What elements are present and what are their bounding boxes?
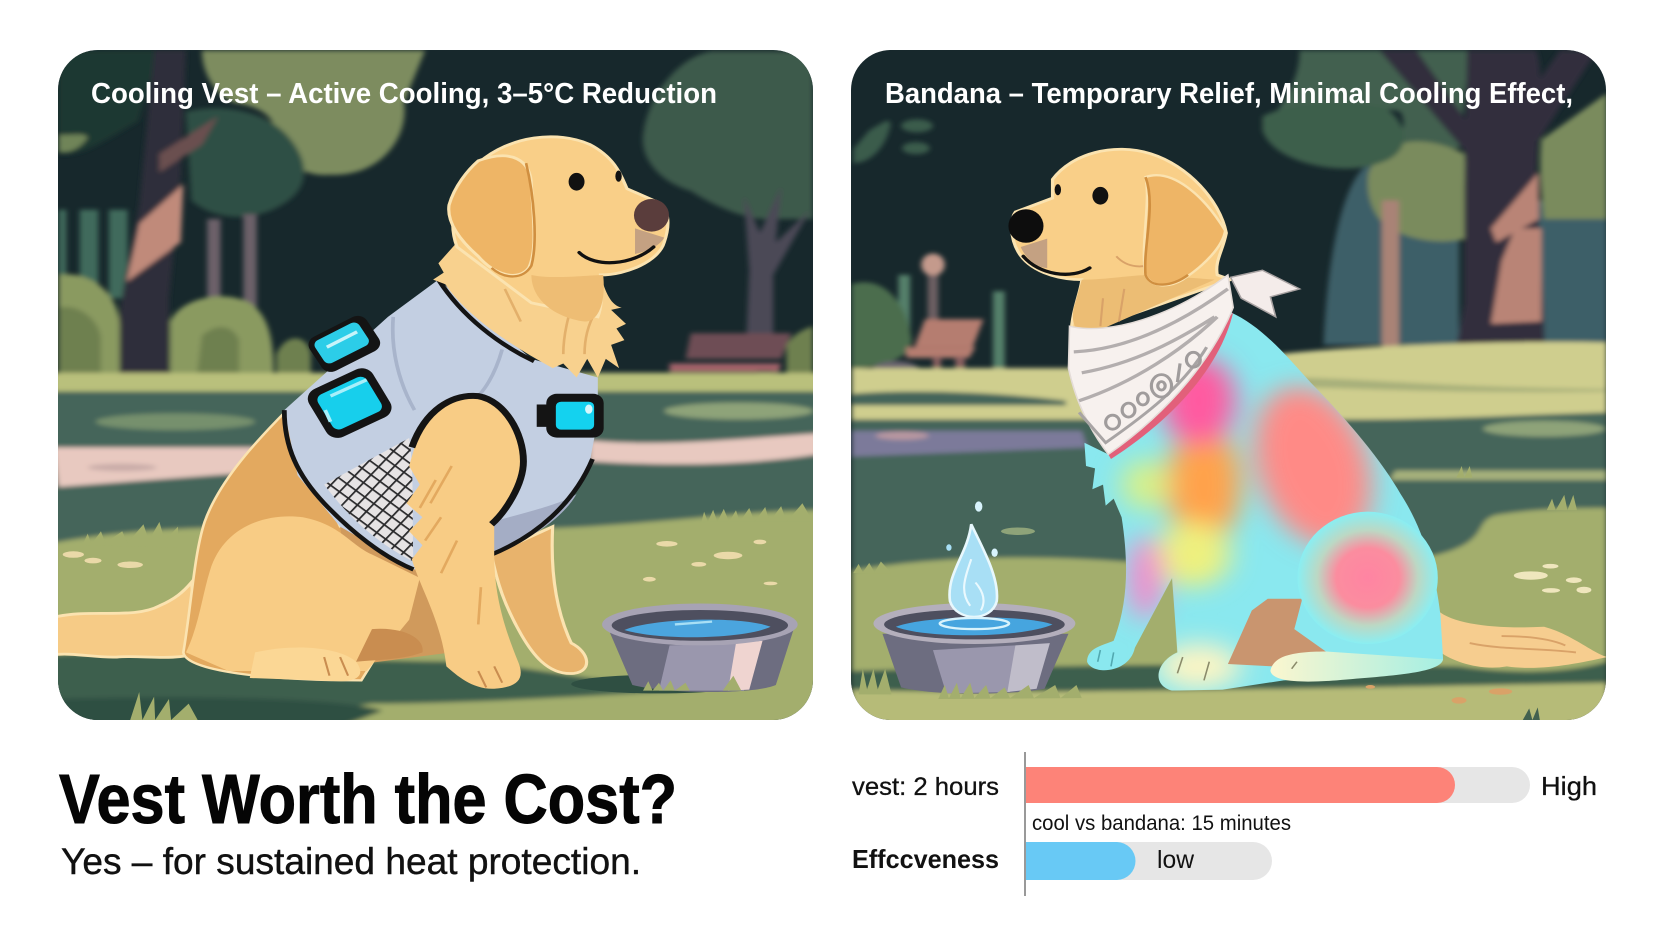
panel heading: bandana: Bandana – Temporary Relief, Minimal Cooling Effect, (885, 78, 1573, 110)
main title: Vest Worth the Cost? (59, 760, 677, 838)
vest (284, 280, 598, 569)
muzzle shade (1021, 239, 1047, 268)
nose (1008, 209, 1043, 243)
cooling packs (303, 313, 604, 442)
panel heading: cooling vest: Cooling Vest – Active Cooling, 3–5°C Reduction (91, 78, 717, 110)
front leg (407, 396, 523, 689)
high label: High (1541, 771, 1597, 801)
effectiveness label: Effccveness (852, 844, 999, 874)
bandana bar track (1025, 842, 1272, 880)
hind paw (250, 648, 360, 681)
bandana (1108, 312, 1233, 459)
panel: bandana (843, 47, 1618, 727)
eyes (1092, 187, 1108, 205)
mane (433, 242, 626, 377)
comparison bar chart (852, 752, 1597, 896)
water splash (950, 524, 997, 617)
hind leg shadow (356, 629, 423, 662)
mouth (1023, 256, 1090, 274)
park background (53, 47, 818, 727)
panel: cooling vest (53, 47, 818, 727)
tail (1438, 610, 1607, 668)
ear (449, 156, 534, 275)
mesh panel (324, 438, 413, 562)
ear (1144, 175, 1225, 285)
muzzle shade (635, 228, 664, 254)
mouth (579, 247, 654, 263)
dog with bandana and heat map (1008, 149, 1607, 699)
haunch (186, 516, 420, 671)
cooling comparison caption: cool vs bandana: 15 minutes (1032, 812, 1291, 835)
body back (182, 414, 374, 682)
thermal body (1084, 312, 1443, 691)
head (453, 137, 668, 317)
far leg (492, 527, 587, 674)
axis (1024, 752, 1026, 896)
tail (53, 582, 202, 657)
hind foot (1270, 651, 1443, 682)
eyes (569, 173, 585, 191)
park background (843, 47, 1618, 727)
bandana bar fill (1025, 842, 1136, 880)
vest duration label: vest: 2 hours (852, 773, 999, 801)
nose (634, 199, 669, 232)
water bowl with splash (859, 501, 1082, 699)
vest bar fill (1025, 767, 1455, 803)
vest trim (284, 410, 593, 569)
bandana knot (1231, 270, 1300, 317)
vest bar track (1025, 767, 1530, 803)
neck and head (1012, 149, 1231, 336)
low label: low (1157, 846, 1195, 874)
grass and flecks (85, 503, 808, 540)
dog with cooling vest (53, 137, 669, 689)
hip heat spot (1298, 512, 1438, 644)
water bowl (571, 603, 798, 693)
subtitle: Yes – for sustained heat protection. (61, 841, 641, 882)
